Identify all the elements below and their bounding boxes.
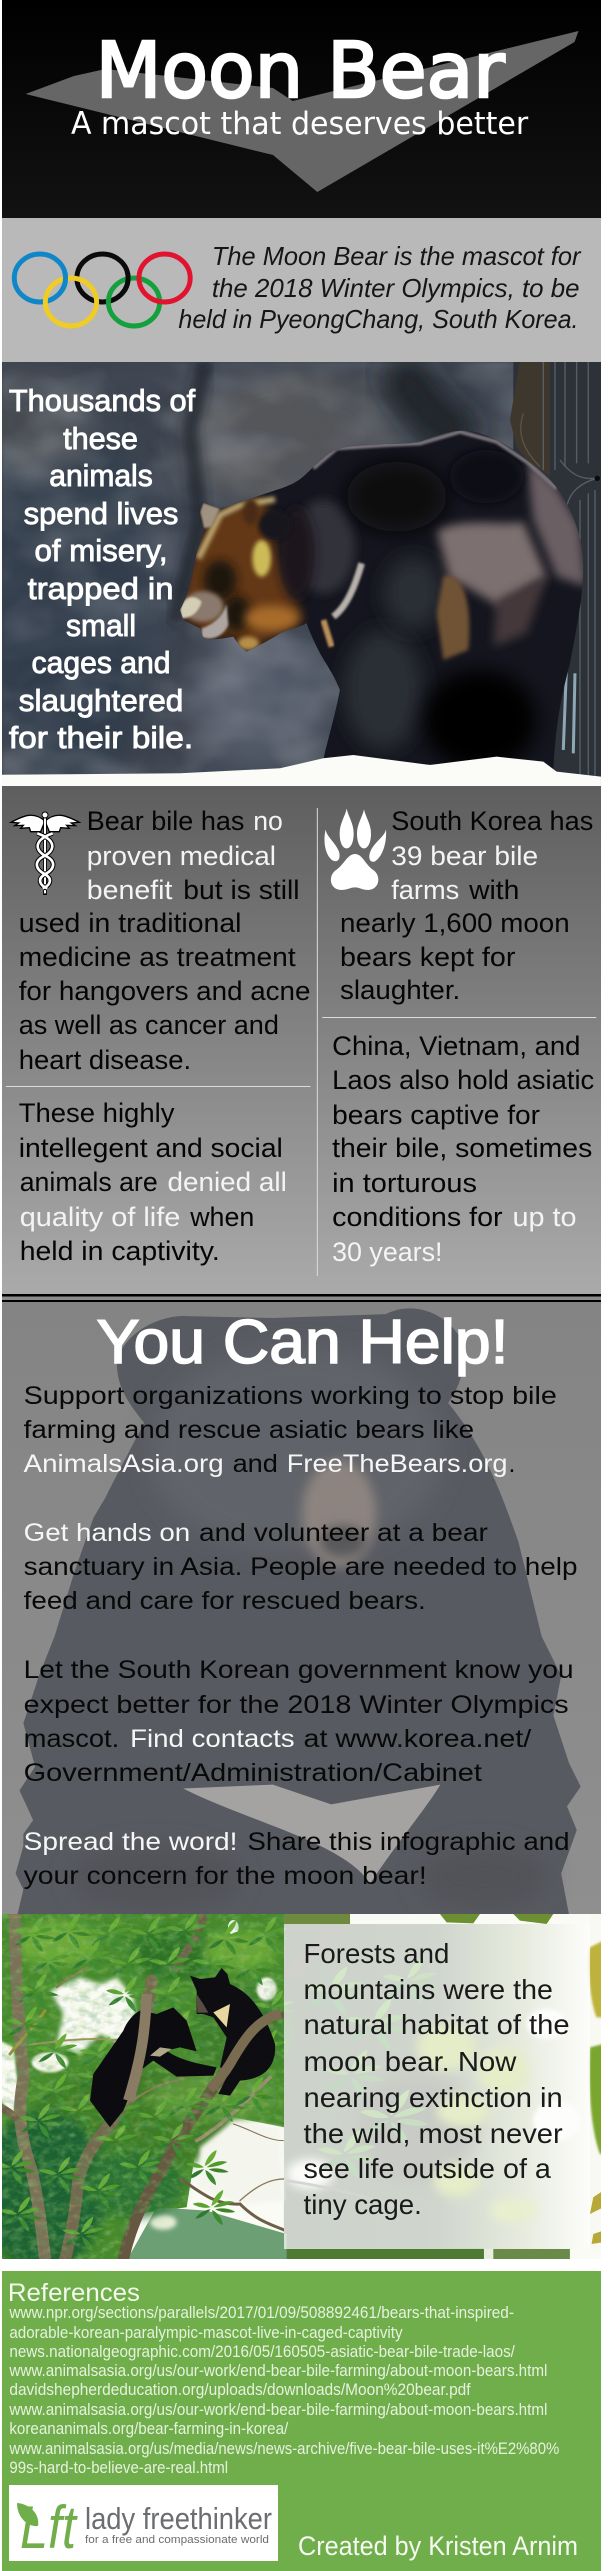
text: medical benefit: as well as cancer and bbox=[19, 1010, 279, 1040]
text: medical benefit: no bbox=[253, 806, 283, 836]
panel: facts bbox=[2, 786, 601, 1294]
header panel bbox=[2, 0, 601, 218]
text: China Vietnam Laos: in torturous bbox=[332, 1168, 477, 1198]
text: China Vietnam Laos bbox=[332, 1031, 594, 1267]
text: natural habitat: natural habitat of the bbox=[304, 2009, 570, 2040]
text: China Vietnam Laos: their bile, sometimes bbox=[332, 1133, 592, 1163]
text: natural habitat: moon bear. Now bbox=[304, 2046, 517, 2077]
text: contact government: expect better for the 2018 Winter Olympics bbox=[24, 1692, 569, 1719]
text: natural habitat: tiny cage. bbox=[304, 2189, 422, 2220]
corrugated wall bbox=[510, 360, 602, 787]
text: volunteer: feed and care for rescued bears. bbox=[24, 1588, 426, 1615]
reference text bbox=[8, 2280, 559, 2477]
facts text columns bbox=[6, 806, 596, 1276]
reference list: www.animalsasia.org/us/media/news/news-archive/five-bear-bile-uses-it%E2%80% bbox=[8, 2439, 559, 2458]
text: spread the word: your concern for the moon bear! bbox=[24, 1863, 427, 1890]
hero text: cages and bbox=[32, 645, 170, 680]
reference list: 99s-hard-to-believe-are-real.html bbox=[9, 2458, 228, 2477]
hero text: trapped in bbox=[28, 571, 173, 606]
text: spread the word: Share this infographic and bbox=[247, 1829, 570, 1856]
text: support organizations: Support organizations working to stop bile bbox=[24, 1383, 557, 1410]
text: China Vietnam Laos: China, Vietnam, and bbox=[332, 1031, 580, 1061]
text: support organizations: and bbox=[233, 1451, 278, 1478]
text: contact government: Government/Administration/Cabinet bbox=[24, 1760, 482, 1787]
logo mark: Lft bbox=[20, 2494, 78, 2561]
credit: Created by Kristen Arnim bbox=[298, 2531, 578, 2561]
bear, wall and snow bbox=[0, 360, 602, 787]
text: volunteer: Get hands on bbox=[24, 1520, 190, 1547]
hero text: animals bbox=[49, 458, 153, 493]
text: intelligence: These highly bbox=[19, 1098, 175, 1128]
text: contact government: at www.korea.net/ bbox=[304, 1726, 531, 1753]
reference list: www.animalsasia.org/us/our-work/end-bear-bile-farming/about-moon-bears.html bbox=[8, 2400, 547, 2419]
text: contact government bbox=[24, 1657, 574, 1787]
background foliage behind panel bbox=[284, 1914, 603, 2261]
faded bear bbox=[16, 1308, 581, 1914]
text: spread the word: Spread the word! bbox=[24, 1829, 238, 1856]
text: intelligence: intellegent and social bbox=[19, 1133, 283, 1163]
title: Moon Bear bbox=[96, 26, 505, 116]
text: contact government: mascot. bbox=[24, 1726, 119, 1753]
text: South Korea farms: slaughter. bbox=[340, 975, 460, 1005]
logo tagline: for a free and compassionate world bbox=[85, 2534, 269, 2546]
bear cubs bbox=[90, 1968, 281, 2127]
heading: you can help: You Can Help! bbox=[97, 1308, 509, 1377]
text: natural habitat: nearing extinction in bbox=[304, 2082, 563, 2113]
text: volunteer: and volunteer at a bear bbox=[199, 1520, 488, 1547]
hero text: spend lives bbox=[24, 496, 178, 531]
text: intelligence: denied all bbox=[168, 1167, 287, 1197]
text: spread the word bbox=[24, 1829, 570, 1890]
intro contents bbox=[14, 243, 582, 334]
text: South Korea farms: with bbox=[468, 875, 519, 905]
icon: caduceus bbox=[11, 812, 79, 895]
reference list: adorable-korean-paralympic-mascot-live-in-caged-captivity bbox=[9, 2323, 403, 2342]
header artwork and titles bbox=[26, 26, 578, 192]
text: natural habitat bbox=[304, 1938, 570, 2220]
hero text: Thousands of bbox=[9, 383, 196, 418]
text: medical benefit: benefit bbox=[87, 875, 173, 905]
logo wordmark: lady freethinker bbox=[85, 2501, 272, 2536]
text: intelligence bbox=[19, 1098, 287, 1266]
help contents bbox=[24, 1308, 578, 1890]
text: South Korea farms: bears kept for bbox=[340, 942, 515, 972]
text: medical benefit: for hangovers and acne bbox=[19, 976, 310, 1006]
reference list: www.animalsasia.org/us/our-work/end-bear-bile-farming/about-moon-bears.html bbox=[8, 2361, 547, 2380]
text: contact government: Let the South Korean government know you bbox=[24, 1657, 574, 1684]
heading: references: References bbox=[8, 2280, 140, 2307]
text: support organizations: FreeTheBears.org bbox=[287, 1451, 508, 1478]
text: natural habitat: mountains were the bbox=[304, 1974, 553, 2005]
text: South Korea farms bbox=[340, 806, 593, 1005]
hero text: these bbox=[63, 421, 138, 456]
text: natural habitat: see life outside of a bbox=[304, 2153, 551, 2184]
text: medical benefit: but is still bbox=[183, 875, 300, 905]
text: volunteer bbox=[24, 1520, 578, 1615]
text: medical benefit: proven medical bbox=[87, 841, 276, 871]
intro text: the 2018 Winter Olympics, to be bbox=[212, 275, 579, 303]
hero text: for their bile. bbox=[9, 720, 193, 755]
text: China Vietnam Laos: up to bbox=[512, 1202, 577, 1232]
text: medical benefit bbox=[19, 806, 310, 1075]
text: South Korea farms: nearly 1,600 moon bbox=[340, 908, 570, 938]
panel: forest habitat bbox=[0, 1913, 603, 2271]
translucent text panel bbox=[284, 1924, 590, 2249]
text: volunteer: sanctuary in Asia. People are needed to help bbox=[24, 1554, 578, 1581]
text: China Vietnam Laos: bears captive for bbox=[332, 1100, 540, 1130]
text: medical benefit: medicine as treatment bbox=[19, 942, 296, 972]
branches and trunks bbox=[0, 1914, 284, 2259]
text: natural habitat: Forests and bbox=[304, 1938, 449, 1969]
arrow shape behind title bbox=[26, 31, 578, 192]
snow ledge bbox=[0, 755, 601, 786]
foreground greenery bbox=[0, 1914, 290, 2271]
hero text bbox=[9, 383, 196, 755]
logo: lady freethinker bbox=[9, 2485, 278, 2561]
hero text: slaughtered bbox=[19, 683, 183, 718]
icon: bear paw bbox=[324, 809, 386, 890]
text: medical benefit: heart disease. bbox=[19, 1045, 191, 1075]
hero text: of misery, bbox=[34, 533, 168, 568]
panel: references footer bbox=[2, 2271, 601, 2571]
panel: captive bear photo bbox=[0, 360, 602, 790]
text: China Vietnam Laos: conditions for bbox=[332, 1202, 503, 1232]
forest photo bbox=[0, 1913, 603, 2271]
text: intelligence: held in captivity. bbox=[20, 1236, 220, 1266]
reference list bbox=[8, 2303, 559, 2477]
text: contact government: Find contacts bbox=[130, 1726, 295, 1753]
text: support organizations: AnimalsAsia.org bbox=[24, 1451, 224, 1478]
text: support organizations: . bbox=[509, 1451, 515, 1478]
leaves bbox=[0, 1913, 295, 2252]
reference list: davidshepherdeducation.org/uploads/downloads/Moon%20bear.pdf bbox=[9, 2380, 471, 2399]
hero text: small bbox=[66, 608, 136, 643]
intro text: The Moon Bear is the mascot for bbox=[212, 243, 582, 271]
intro text bbox=[178, 243, 582, 334]
text: support organizations: farming and rescue asiatic bears like bbox=[24, 1417, 474, 1444]
reference list: www.npr.org/sections/parallels/2017/01/09/508892461/bears-that-inspired- bbox=[8, 2303, 514, 2322]
text: intelligence: when bbox=[189, 1202, 254, 1232]
subtitle: A mascot that deserves better bbox=[71, 106, 529, 142]
text: China Vietnam Laos: Laos also hold asiatic bbox=[332, 1065, 594, 1095]
text: intelligence: quality of life bbox=[20, 1202, 180, 1232]
text: natural habitat: the wild, most never bbox=[304, 2118, 563, 2149]
text: medical benefit: used in traditional bbox=[19, 908, 241, 938]
icon: olympic rings bbox=[14, 254, 190, 326]
panel: you can help bbox=[2, 1302, 601, 1914]
panel: olympics intro bbox=[2, 218, 601, 362]
reference list: news.nationalgeographic.com/2016/05/160505-asiatic-bear-bile-trade-laos/ bbox=[9, 2342, 515, 2361]
text: support organizations bbox=[24, 1383, 557, 1478]
text: South Korea farms: South Korea has bbox=[391, 806, 593, 836]
text: intelligence: animals are bbox=[20, 1167, 158, 1197]
bear bbox=[173, 420, 593, 780]
text: South Korea farms: farms bbox=[391, 875, 459, 905]
intro text: held in PyeongChang, South Korea. bbox=[178, 306, 578, 334]
text: South Korea farms: 39 bear bile bbox=[391, 841, 538, 871]
reference list: koreananimals.org/bear-farming-in-korea/ bbox=[9, 2419, 289, 2438]
text: medical benefit: Bear bile has bbox=[87, 806, 244, 836]
text: China Vietnam Laos: 30 years! bbox=[332, 1237, 442, 1267]
